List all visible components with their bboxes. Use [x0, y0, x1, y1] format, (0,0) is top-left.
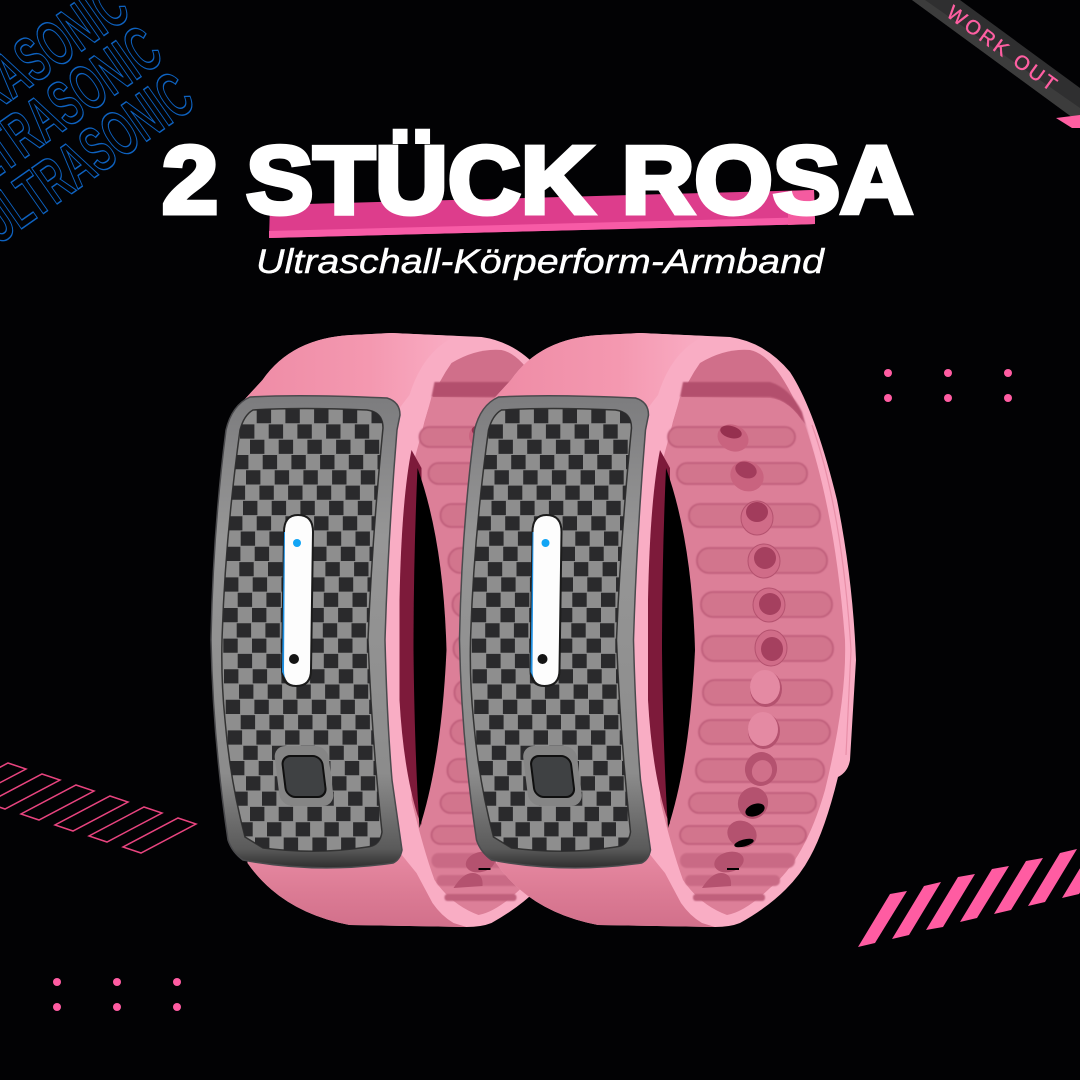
ribbon: work out — [912, 0, 1080, 128]
dot grid: lower left — [53, 978, 181, 1011]
left checkered face — [211, 396, 402, 868]
right strap and band — [488, 333, 856, 927]
bracelet: left — [211, 333, 608, 927]
highlight bar behind title — [269, 190, 815, 238]
dot grid: upper right — [884, 369, 1012, 402]
subtitle: Ultraschall-Körperform-Armband — [256, 243, 825, 281]
bracelet: right — [460, 333, 856, 927]
left strap and band — [240, 333, 608, 927]
outlined stripes: lower left — [0, 763, 196, 853]
ribbon: work out: WORK OUT — [942, 2, 1060, 96]
title: 2 STÜCK ROSA — [162, 127, 913, 234]
decorative outlined text: ULTRASONIC — [0, 0, 206, 257]
right checkered face — [460, 396, 650, 868]
filled stripes: lower right — [858, 841, 1080, 947]
